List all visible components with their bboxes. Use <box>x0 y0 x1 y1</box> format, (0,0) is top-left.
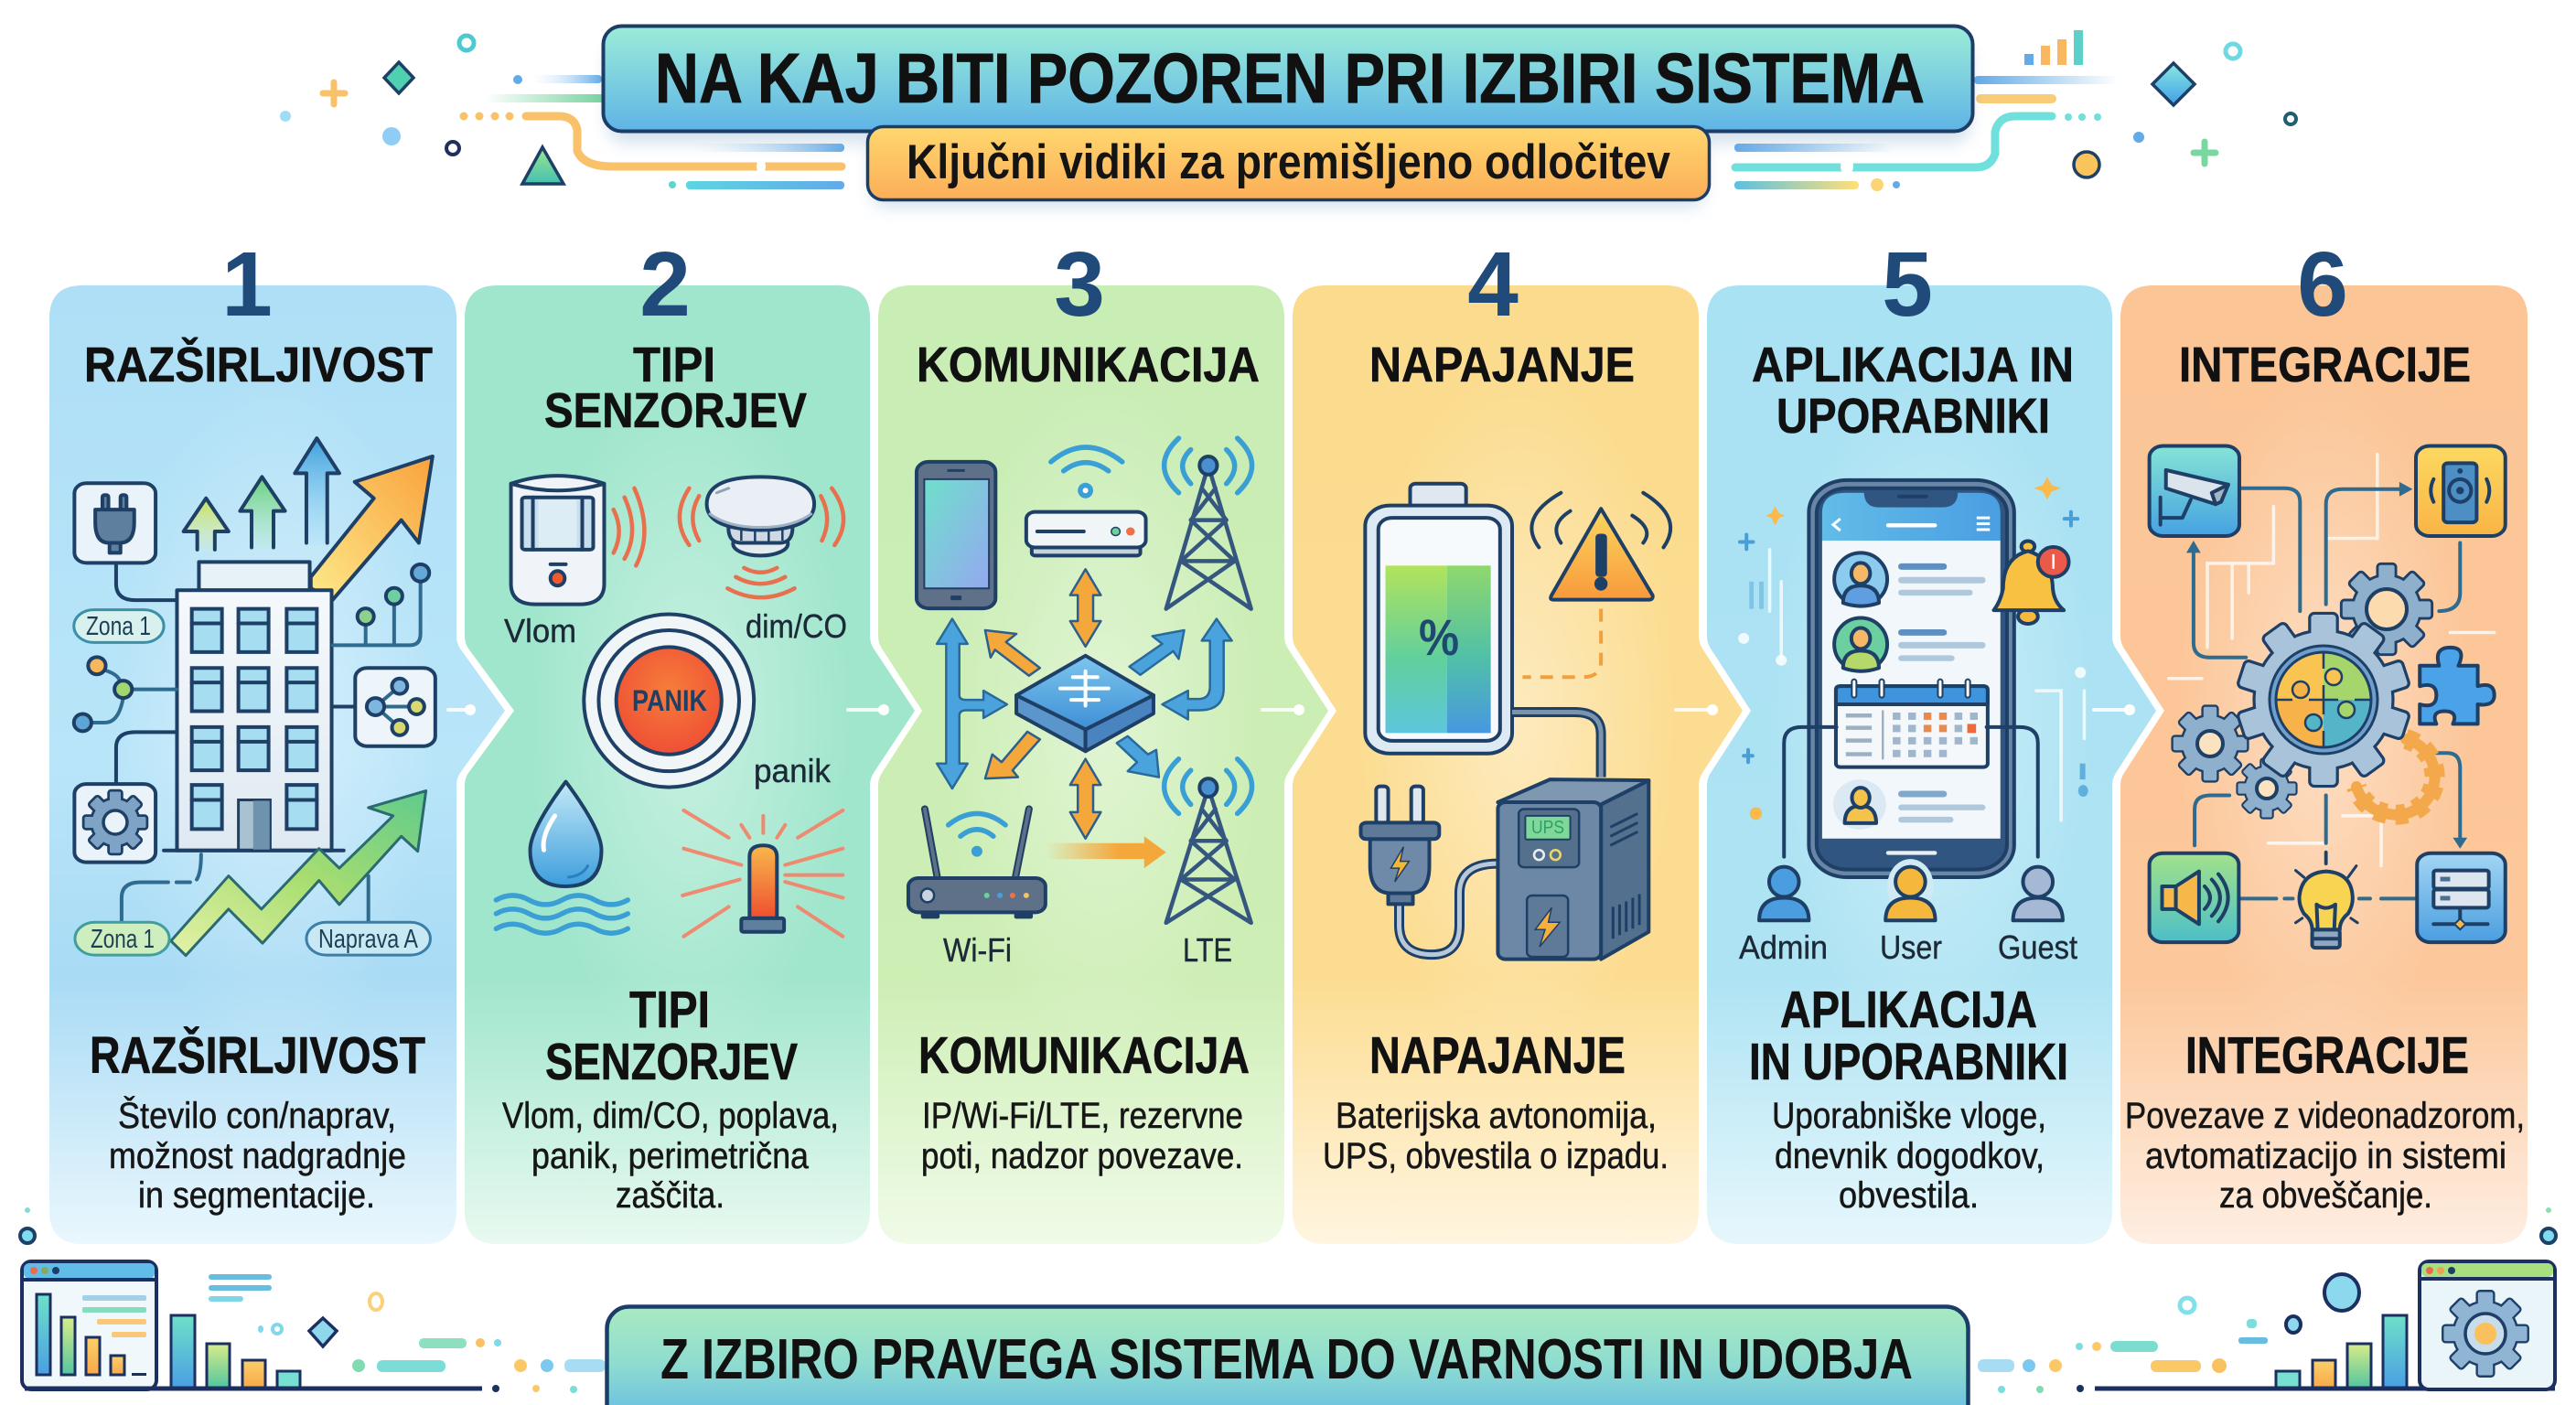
gear: left <box>2174 707 2247 780</box>
number 3: 3 <box>1054 233 1105 336</box>
bars on baseline <box>25 1315 499 1392</box>
icon: gear <box>84 792 146 853</box>
integration icons <box>2150 446 2506 948</box>
icon: cell tower bottom <box>1165 759 1252 923</box>
bottom heading 2: TIPI <box>629 981 710 1039</box>
zigzag growth arrow <box>171 791 426 956</box>
heading 4: NAPAJANJE <box>1369 338 1635 392</box>
heading 1: RAZŠIRLJIVOST <box>84 337 433 392</box>
power illustration <box>1361 484 1670 960</box>
icon: bell <box>1993 541 2069 624</box>
header decoration: right <box>1734 30 2296 191</box>
label Zona 1 lower: Zona 1 <box>91 925 155 954</box>
footer text: Z IZBIRO PRAVEGA SISTEMA DO VARNOSTI IN UDOBJA <box>660 1328 1913 1391</box>
heading 5 <box>1752 338 2074 444</box>
icon: smoke detector <box>680 477 843 597</box>
description 5 <box>1772 1096 2046 1216</box>
icon: battery <box>1365 484 1512 754</box>
connector lines <box>2186 482 2467 898</box>
footer decoration: right <box>1978 1207 2556 1393</box>
browser window gear <box>2420 1261 2555 1389</box>
heading 2 <box>544 338 807 438</box>
icon: plug <box>1361 787 1497 955</box>
number 2: 2 <box>639 233 691 336</box>
arrows: network links <box>937 569 1232 868</box>
description 2: Vlom, dim/CO, poplava, <box>502 1096 839 1136</box>
icon: smartphone <box>1809 480 2014 877</box>
app illustration <box>1738 477 2088 920</box>
tree connector <box>333 564 429 645</box>
label Naprava A: Naprava A <box>318 925 419 954</box>
icon: wifi router <box>908 809 1046 918</box>
footer decoration: left <box>20 1207 606 1393</box>
bottom heading 6: INTEGRACIJE <box>2185 1026 2469 1085</box>
description 3: poti, nadzor povezave. <box>921 1136 1243 1176</box>
zona pill <box>74 610 164 642</box>
flow connectors between panels <box>448 704 2135 715</box>
browser window chart <box>22 1261 156 1389</box>
gear: small <box>2238 760 2295 817</box>
icon: speaker device <box>2416 446 2506 536</box>
icon: panic button <box>584 615 754 788</box>
pale connectors <box>2169 454 2495 866</box>
naprava pill <box>306 922 430 955</box>
zone connectors <box>122 854 369 922</box>
gear: main <box>2238 615 2409 785</box>
heading 2: SENZORJEV <box>544 383 807 438</box>
icon: share box <box>332 668 435 746</box>
header decoration: left <box>280 36 844 189</box>
icon: phone <box>917 462 995 608</box>
heading 3: KOMUNIKACIJA <box>917 338 1260 392</box>
description 3: IP/Wi-Fi/LTE, rezervne <box>922 1096 1243 1136</box>
heading 5: APLIKACIJA IN <box>1752 338 2074 392</box>
panel 2: tipi senzorjev <box>465 233 915 1244</box>
heading 6: INTEGRACIJE <box>2179 338 2471 392</box>
bottom heading 1: RAZŠIRLJIVOST <box>90 1025 425 1085</box>
panel 2 background <box>465 285 915 1244</box>
contact row 1 <box>1834 552 1985 606</box>
description 5: obvestila. <box>1839 1175 1979 1216</box>
label dim/CO: dim/CO <box>746 607 847 645</box>
icon: server <box>2417 853 2506 942</box>
gear box <box>74 732 177 863</box>
background sparkles <box>1738 477 2088 820</box>
description 4 <box>1323 1096 1669 1176</box>
bottom heading 5: IN UPORABNIKI <box>1749 1033 2068 1091</box>
growth arrows <box>184 438 433 600</box>
gear: upper right <box>2343 565 2431 653</box>
label Vlom: Vlom <box>504 612 576 649</box>
panel 4 background <box>1293 285 1743 1244</box>
icon: guest person <box>2013 867 2063 920</box>
icon: admin person <box>1759 867 1809 920</box>
subtitle banner <box>867 126 1709 207</box>
description 6 <box>2125 1096 2525 1216</box>
icon: motion sensor <box>511 476 644 605</box>
number 5: 5 <box>1882 233 1933 336</box>
gear: orange partial ring <box>2356 739 2435 815</box>
description 6: za obveščanje. <box>2219 1175 2432 1216</box>
icon: user person <box>1885 859 1936 920</box>
bottom heading 2: SENZORJEV <box>545 1033 798 1091</box>
bottom heading 4: NAPAJANJE <box>1369 1026 1626 1085</box>
icon: plug box <box>74 483 177 600</box>
footer banner <box>607 1306 1969 1405</box>
icon: wifi access point <box>1026 447 1146 555</box>
bars on baseline right <box>2095 1315 2555 1389</box>
label Guest: Guest <box>1998 928 2077 966</box>
building <box>164 562 344 851</box>
icon: cell tower top <box>1165 438 1252 609</box>
heading 5: UPORABNIKI <box>1776 389 2050 444</box>
subtitle text: Ključni vidiki za premišljeno odločitev <box>907 135 1670 189</box>
illustration: building and growth <box>74 438 435 956</box>
description 5: Uporabniške vloge, <box>1772 1096 2046 1136</box>
icon: water drop <box>496 782 628 933</box>
description 1: možnost nadgradnje <box>109 1136 406 1176</box>
zona pill lower <box>75 922 169 955</box>
label LTE: LTE <box>1183 931 1232 969</box>
description 2 <box>502 1096 839 1216</box>
description 4: Baterijska avtonomija, <box>1336 1096 1657 1136</box>
panel 5 background <box>1707 285 2156 1244</box>
panel 6 background <box>2120 285 2528 1244</box>
description 4: UPS, obvestila o izpadu. <box>1323 1136 1669 1176</box>
bottom heading 5 <box>1749 981 2068 1091</box>
panel 4: napajanje <box>1293 233 1743 1244</box>
label panik: panik <box>754 752 832 789</box>
title banner <box>604 26 1972 143</box>
sensor illustrations <box>496 476 843 937</box>
panel 6: integracije <box>2120 233 2528 1244</box>
description 3 <box>921 1096 1243 1176</box>
battery percent: % <box>1419 608 1459 666</box>
icon: light bulb <box>2295 853 2357 948</box>
number 4: 4 <box>1467 233 1519 336</box>
description 6: Povezave z videonadzorom, <box>2125 1096 2525 1136</box>
label Admin: Admin <box>1739 928 1828 966</box>
number 1: 1 <box>221 233 273 336</box>
bottom heading 2 <box>545 981 798 1091</box>
contact row 3 <box>1833 779 1985 830</box>
description 2: panik, perimetrična <box>531 1136 810 1176</box>
panel 3 background <box>878 285 1328 1244</box>
description 6: avtomatizacijo in sistemi <box>2145 1136 2506 1176</box>
PANIK label: PANIK <box>632 684 707 717</box>
bottom heading 5: APLIKACIJA <box>1780 981 2037 1039</box>
description 1 <box>109 1095 406 1216</box>
title text: NA KAJ BITI POZOREN PRI IZBIRI SISTEMA <box>655 39 1925 118</box>
description 1: Število con/naprav, <box>118 1095 396 1136</box>
label Zona 1: Zona 1 <box>86 612 151 641</box>
icon: siren <box>682 810 843 937</box>
left nodes <box>74 657 177 731</box>
battery cable <box>1512 712 1601 778</box>
gears <box>2174 565 2435 817</box>
icon: camera <box>2150 446 2239 536</box>
description 5: dnevnik dogodkov, <box>1775 1136 2045 1176</box>
UPS label: UPS <box>1531 818 1564 838</box>
network illustration <box>908 438 1252 923</box>
user connectors <box>1784 727 2038 857</box>
panel 1: razširljivost <box>49 233 505 1244</box>
central hub <box>1016 656 1154 751</box>
number 6: 6 <box>2297 233 2348 336</box>
panel 1 background <box>49 285 505 1244</box>
panel 3: komunikacija <box>878 233 1328 1244</box>
calendar <box>1836 681 1988 767</box>
icon: puzzle piece <box>2420 648 2495 724</box>
label Wi-Fi: Wi-Fi <box>943 931 1012 969</box>
description 1: in segmentacije. <box>138 1175 375 1216</box>
contact row 2 <box>1834 618 1985 671</box>
icon: UPS <box>1497 779 1648 960</box>
icon: warning <box>1531 493 1670 600</box>
panel 5: aplikacija in uporabniki <box>1707 233 2156 1244</box>
bottom heading 3: KOMUNIKACIJA <box>918 1026 1250 1085</box>
heading 2: TIPI <box>633 338 715 392</box>
label User: User <box>1880 928 1942 966</box>
icon: sound <box>2150 853 2238 942</box>
dashed alert link <box>1522 609 1601 677</box>
description 2: zaščita. <box>616 1175 724 1216</box>
